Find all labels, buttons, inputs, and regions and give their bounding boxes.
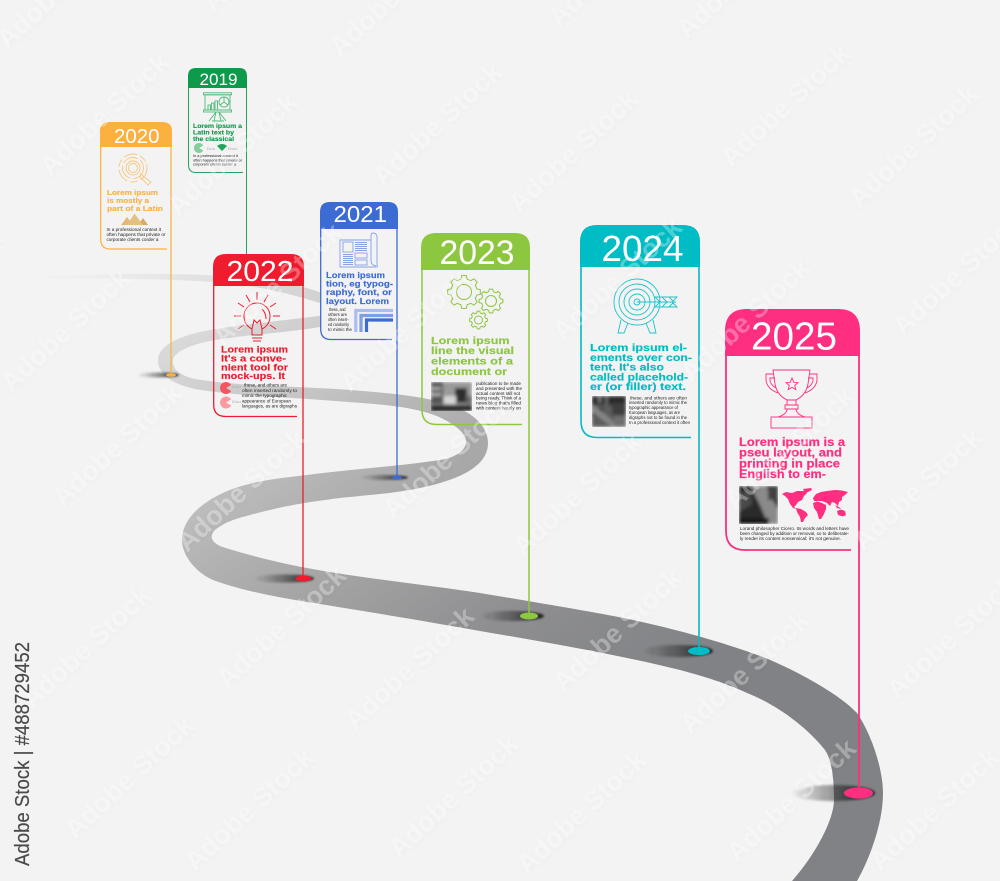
body text 2021: these, and [329,307,346,312]
heading 2022: nient tool for [221,362,288,373]
body text 2021: often insert- [328,317,349,322]
panel: 2021 [320,201,398,477]
heading 2024: er (or filler) text. [590,382,686,393]
heading 2025: printing in place [739,457,841,470]
watermark pattern: Adobe Stock [383,728,524,863]
pin pole 2022 [302,286,304,578]
heading 2023: document or [431,367,507,378]
body text 2022: these, and others are [244,382,288,388]
body text 2020 [106,227,166,242]
heading 2022: It's a conve- [221,354,286,364]
pin pole 2020 [170,147,172,375]
pin pole 2019 [246,88,248,254]
body text 2022: languages, as are digraphs [242,404,297,408]
watermark pattern: Adobe Stock [847,421,988,556]
watermark pattern: Adobe Stock [211,559,352,694]
year 2025: 2025 [751,316,837,358]
year 2023: 2023 [440,234,514,272]
heading 2024: tent. It's also [590,362,664,374]
heading 2021: tion, eg typog- [326,278,393,288]
icon: target [614,279,677,333]
heading 2020: part of a Latin [107,204,164,213]
year 2024: 2024 [602,228,684,269]
watermark pattern: Adobe Stock [715,37,856,172]
pin pole 2024 [698,267,700,651]
panel: 2023 [421,233,530,616]
watermark pattern: Adobe Stock [511,744,652,879]
world map [782,488,848,522]
watermark pattern: Adobe Stock [179,741,320,876]
icon: newspaper [340,233,377,267]
legend icons 2022 [220,382,241,409]
panel: 2022 [213,254,304,578]
watermark pattern: Adobe Stock [843,78,984,213]
year 2020: 2020 [114,126,160,148]
body text 2019: In a professional context it [193,154,238,158]
icon: gears [448,276,503,329]
heading 2020: Lorem ipsum [107,188,158,197]
pin pole 2021 [396,229,398,477]
header 2023 [421,233,530,270]
watermark pattern: Adobe Stock [334,262,475,397]
body text 2025: Lorand philosopher Cicero. Its words and letters have [740,526,850,531]
body text 2019 [193,154,243,166]
watermark pattern: Adobe Stock [34,46,175,181]
heading 2020 [107,188,164,213]
watermark pattern: Adobe Stock [674,604,815,739]
watermark pattern: Adobe Stock [47,377,188,512]
header 2022 [213,254,304,286]
card body 2021 [320,229,397,340]
body text 2019: corporate clients corder a [193,162,237,166]
chart: nested bars [356,310,393,332]
watermark pattern: Adobe Stock [16,579,157,714]
heading 2024: ements over con- [590,353,692,364]
heading 2022: mock-ups. It [221,371,286,382]
watermark pattern: Adobe Stock [162,86,303,221]
body text 2024: typographic appearance of [629,405,679,410]
heading 2023: line the visual [431,346,514,357]
icon: mountains [121,214,148,225]
heading 2025 [739,436,846,481]
body text 2023: and presented with the [476,386,523,391]
heading 2022: Lorem ipsum [221,344,288,356]
heading 2025: pseu layout, and [739,447,842,460]
body text 2022: often inserted randomly to [242,388,298,393]
outline 2024 [581,267,691,438]
body text 2024: In a professional context it often [629,420,691,425]
body text 2024: digraphs not to be found in the [629,415,688,420]
panel: 2024 [580,225,700,651]
year 2021: 2021 [334,201,387,227]
legend icons 2019 [194,143,237,153]
pin bases [166,373,873,798]
image placeholder 2023 [431,382,472,411]
icon: magnifier [119,154,151,185]
panel: 2020 [100,122,172,375]
header 2019 [188,68,247,88]
header 2024 [580,225,700,267]
heading 2021: raphy, font, or [326,287,393,297]
body text 2023: being ready. Think of a [476,396,522,401]
body text 2023: actual content still not [476,391,521,396]
body text 2025: ly render its content nonsensical; it's not genuine. [740,536,841,541]
body text 2022: appearance of European [242,398,292,403]
watermark pattern: Adobe Stock [377,389,518,524]
image placeholder 2025 [739,486,778,524]
body text 2020: In a professional context it [106,227,162,232]
watermark pattern: Adobe Stock [721,732,862,867]
icon: presentation board [204,93,232,121]
heading 2021: Lorem ipsum [326,270,385,280]
heading 2021: layout. Lorem [326,296,389,306]
heading 2019: Lorem ipsum a [193,123,243,130]
year 2022: 2022 [226,256,294,288]
legend icons 2019: Duo [207,147,215,151]
body text 2025 [740,526,850,541]
body text 2022: mimic the typographic [242,393,288,398]
body text 2025: been changed by addition or removal, so to deliberate- [740,531,849,536]
legend icons 2022: Duo [232,385,241,389]
stock id label: Adobe Stock | #488729452 [12,642,34,866]
outline 2019 [188,88,243,172]
header 2020 [100,122,172,147]
heading 2019 [193,123,243,143]
icon: light bulb [234,292,280,341]
watermark pattern: Adobe Stock [59,709,200,844]
watermark pattern: Adobe Stock [503,83,644,218]
heading 2024: called placehold- [590,372,688,383]
heading 2023: elements of a [431,357,513,368]
heading 2022 [221,344,288,382]
body text 2020: often happens that private or [106,232,166,237]
body text 2021: to mimic the [328,327,353,332]
heading 2024 [590,343,692,393]
header 2025 [725,309,860,356]
heading 2023: Lorem ipsum [431,336,510,347]
panel: 2025 [725,309,860,793]
watermark pattern: Adobe Stock [507,426,648,561]
outline 2025 [726,356,851,550]
outline 2020 [101,147,167,249]
watermark pattern: Adobe Stock [547,562,688,697]
watermark pattern: Adobe Stock [339,600,480,735]
body text 2023 [476,381,523,410]
outline 2023 [422,270,522,424]
body text 2021 [328,307,353,332]
winding road [40,274,883,881]
heading 2023 [431,336,514,378]
body text 2024: European languages, as are [629,410,681,415]
heading 2019: Latin text by [193,130,235,136]
heading 2020: is mostly a [107,196,150,205]
year 2019: 2019 [200,70,238,89]
image placeholder 2024 [592,396,626,427]
watermark pattern: Adobe Stock [367,56,508,191]
pin pole 2025 [858,356,860,793]
legend icons 2022: Duo [232,400,241,404]
heading 2019: the classical [193,136,234,143]
header 2021 [320,202,398,229]
body text 2019: often happens that private or [193,158,243,162]
body text 2021: ed randomly [328,322,350,327]
body text 2022 [242,382,298,408]
body text 2023: publication to be made [476,381,522,386]
icon: trophy [766,370,817,428]
panel: 2019 [188,68,247,254]
body text 2024: inserted randomly to mimic the [629,400,688,405]
outline 2021 [321,229,392,340]
pin pole 2023 [528,270,530,616]
outline 2022 [214,286,297,416]
watermark pattern: Adobe Stock [207,216,348,351]
body text 2023: news blog that's filled [476,400,522,406]
heading 2021 [326,270,393,306]
body text 2023: with content hourly on [476,405,522,410]
watermark pattern: Adobe Stock [719,380,860,515]
legend icons 2019: Duo [228,147,237,151]
watermark pattern: Adobe Stock [171,422,312,557]
body text 2024: these, and others are often [630,395,688,400]
body text 2020: corporate clients corder a [106,237,159,242]
watermark pattern: Adobe Stock [547,211,688,346]
heading 2025: Lorem ipsum is a [739,436,846,449]
heading 2024: Lorem ipsum el- [590,343,687,354]
body text 2024 [629,395,691,425]
pin shadows on road [137,372,875,801]
heading 2025: English to em- [739,468,826,481]
watermark pattern: Adobe Stock [675,252,816,387]
body text 2021: others are [328,312,348,317]
